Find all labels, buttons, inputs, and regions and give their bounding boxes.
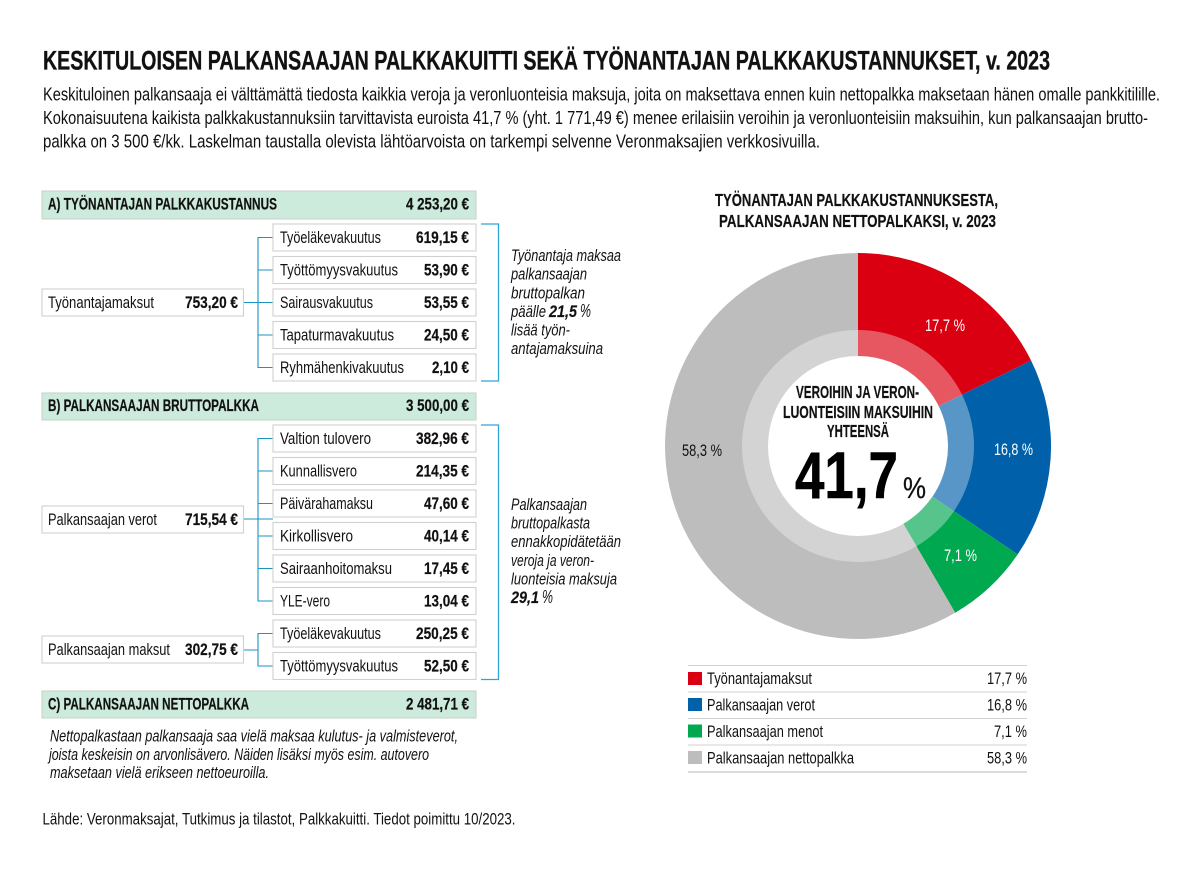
row: Ryhmähenkivakuutus <box>273 354 476 381</box>
panel: C net pay header: C) PALKANSAAJAN NETTOPALKKA <box>48 696 249 714</box>
donut chart: 58,3 % <box>682 442 722 460</box>
row: Sairaanhoitomaksu: Sairaanhoitomaksu <box>280 560 392 578</box>
chart title: TYÖNANTAJAN PALKKAKUSTANNUKSESTA, <box>715 190 998 210</box>
donut centre label: 41,7 <box>795 438 898 512</box>
connector: employee taxes <box>244 438 273 601</box>
source: Lähde: Veronmaksajat, Tutkimus ja tilastot, Palkkakuitti. Tiedot poimittu 10/2023. <box>42 810 516 828</box>
note: net pay: Nettopalkastaan palkansaaja saa vielä maksaa kulutus- ja valmisteverot, <box>50 728 458 746</box>
legend: Työnantajamaksut <box>707 670 812 688</box>
donut chart: 16,8 % <box>994 441 1033 459</box>
row: Kunnallisvero: 214,35 € <box>416 462 469 480</box>
row: Työeläkevakuutus (employee): 250,25 € <box>416 625 469 643</box>
note: employer contributions: % <box>580 301 591 321</box>
donut centre label: LUONTEISIIN MAKSUIHIN <box>783 402 933 422</box>
note: net pay: joista keskeisin on arvonlisävero. Näiden lisäksi myös esim. autovero <box>47 746 429 764</box>
row: YLE-vero: YLE-vero <box>280 592 330 610</box>
row: Työttömyysvakuutus <box>273 256 476 284</box>
bracket: employee note <box>481 425 498 680</box>
row: Päivärahamaksu: 47,60 € <box>424 495 469 513</box>
row: Työttömyysvakuutus (employee) <box>273 652 476 680</box>
box: Työnantajamaksut: 753,20 € <box>185 294 238 312</box>
row: Tapaturmavakuutus: Tapaturmavakuutus <box>280 326 394 344</box>
note: employee deductions: luonteisia maksuja <box>511 570 617 588</box>
intro text <box>43 84 1160 152</box>
note: employer contributions: palkansaajan <box>510 266 587 284</box>
panel: A employer cost header: A) TYÖNANTAJAN PALKKAKUSTANNUS <box>48 194 277 214</box>
note: employer contributions <box>510 247 621 358</box>
row: Sairausvakuutus <box>273 289 476 316</box>
note: net pay: maksetaan vielä erikseen nettoeuroilla. <box>50 764 269 782</box>
note: employee deductions: veroja ja veron- <box>511 552 594 570</box>
note: employee deductions: bruttopalkasta <box>511 514 590 532</box>
note: employee deductions: ennakkopidätetään <box>511 533 621 551</box>
row: Työeläkevakuutus: 619,15 € <box>416 229 469 247</box>
row: Valtion tulovero <box>273 425 476 452</box>
panel: C net pay header <box>42 691 476 718</box>
legend <box>688 666 1027 772</box>
row: Tapaturmavakuutus: 24,50 € <box>424 326 469 344</box>
note: employer contributions: antajamaksuina <box>511 340 603 358</box>
slice: Palkansaajan verot <box>858 361 1051 554</box>
connector: employee contributions <box>244 634 273 666</box>
panel: B gross pay header: B) PALKANSAAJAN BRUTTOPALKKA <box>48 397 259 415</box>
note: employer contributions: 21,5 <box>548 303 578 321</box>
box: Palkansaajan maksut: Palkansaajan maksut <box>48 641 170 659</box>
panel: B gross pay header: 3 500,00 € <box>406 397 469 415</box>
chart title <box>715 190 998 231</box>
row: Päivärahamaksu: Päivärahamaksu <box>280 495 373 513</box>
panel: A employer cost header <box>42 191 476 219</box>
bracket: employer note <box>481 224 498 381</box>
row: Työeläkevakuutus <box>273 224 476 251</box>
box: Palkansaajan verot: 715,54 € <box>185 511 238 529</box>
box: Palkansaajan verot <box>42 506 244 533</box>
box: Palkansaajan verot: Palkansaajan verot <box>48 511 157 529</box>
row: Päivärahamaksu <box>273 490 476 517</box>
legend: 16,8 % <box>987 696 1027 714</box>
row: Kunnallisvero <box>273 458 476 484</box>
row: Kunnallisvero: Kunnallisvero <box>280 462 357 480</box>
note: employer contributions: päälle <box>510 303 546 321</box>
note: employer contributions: bruttopalkan <box>511 284 585 302</box>
row: Kirkollisvero: Kirkollisvero <box>280 528 353 546</box>
row: Sairausvakuutus: 53,55 € <box>424 294 469 312</box>
box: Palkansaajan maksut: 302,75 € <box>185 641 238 659</box>
row: YLE-vero: 13,04 € <box>424 592 469 610</box>
note: employer contributions: Työnantaja maksaa <box>511 247 621 265</box>
row: Työttömyysvakuutus (employee): 52,50 € <box>424 658 469 676</box>
note: employee deductions: Palkansaajan <box>511 496 587 514</box>
row: Työeläkevakuutus (employee) <box>273 620 476 647</box>
donut centre label: YHTEENSÄ <box>827 421 889 441</box>
note: employee deductions: % <box>542 587 553 607</box>
row: Työttömyysvakuutus (employee): Työttömyysvakuutus <box>280 658 398 676</box>
row: Sairausvakuutus: Sairausvakuutus <box>280 294 373 312</box>
row: Sairaanhoitomaksu: 17,45 € <box>424 560 469 578</box>
legend: Palkansaajan menot <box>707 723 823 741</box>
slice: Palkansaajan nettopalkka <box>665 253 955 639</box>
row: Työttömyysvakuutus: Työttömyysvakuutus <box>280 262 398 280</box>
panel: A employer cost header: 4 253,20 € <box>406 196 469 214</box>
note: employer contributions: lisää työn- <box>511 322 570 340</box>
connector: employer contributions <box>244 238 273 368</box>
donut chart: 7,1 % <box>944 547 977 565</box>
box: Palkansaajan maksut <box>42 636 244 663</box>
note: net pay <box>47 728 458 782</box>
row: Sairaanhoitomaksu <box>273 555 476 582</box>
row: Tapaturmavakuutus <box>273 322 476 348</box>
row: Työeläkevakuutus (employee): Työeläkevakuutus <box>280 625 381 643</box>
donut centre label <box>783 382 933 512</box>
row: Kirkollisvero: 40,14 € <box>424 528 469 546</box>
legend: 7,1 % <box>994 723 1027 741</box>
note: employee deductions: 29,1 <box>510 589 539 607</box>
slice: Palkansaajan menot <box>858 446 1018 613</box>
donut centre label: VEROIHIN JA VERON- <box>796 382 919 402</box>
row: Ryhmähenkivakuutus: Ryhmähenkivakuutus <box>280 359 404 377</box>
legend: 17,7 % <box>987 670 1027 688</box>
row: Valtion tulovero: 382,96 € <box>416 430 469 448</box>
row: Ryhmähenkivakuutus: 2,10 € <box>432 359 469 377</box>
box: Työnantajamaksut <box>42 289 244 316</box>
panel: B gross pay header <box>42 393 476 420</box>
legend: Palkansaajan verot <box>707 696 815 714</box>
intro text: palkka on 3 500 €/kk. Laskelman taustalla olevista lähtöarvoista on tarkempi selvenne Veronmaksajien verkkosivuilla. <box>43 132 820 152</box>
row: YLE-vero <box>273 588 476 614</box>
donut centre label: % <box>903 472 926 505</box>
panel: C net pay header: 2 481,71 € <box>406 696 469 714</box>
chart title: PALKANSAAJAN NETTOPALKAKSI, v. 2023 <box>719 211 996 231</box>
box: Työnantajamaksut: Työnantajamaksut <box>48 294 154 312</box>
legend: Palkansaajan nettopalkka <box>707 750 855 768</box>
row: Valtion tulovero: Valtion tulovero <box>280 430 371 448</box>
row: Työeläkevakuutus: Työeläkevakuutus <box>280 229 381 247</box>
legend: 58,3 % <box>987 750 1027 768</box>
row: Kirkollisvero <box>273 522 476 550</box>
row: Työttömyysvakuutus: 53,90 € <box>424 262 469 280</box>
donut chart: 17,7 % <box>925 317 965 335</box>
note: employee deductions <box>510 496 621 607</box>
slice: Työnantajamaksut <box>858 253 1031 446</box>
donut chart <box>665 253 1051 639</box>
